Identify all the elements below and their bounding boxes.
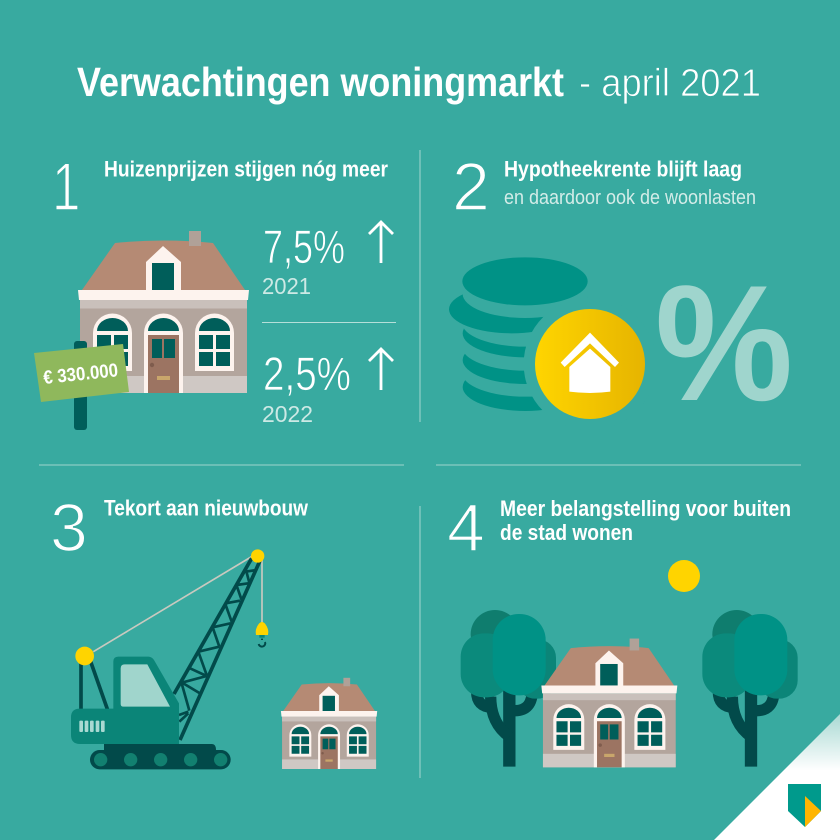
stat 2022: 2,5% bbox=[263, 347, 351, 400]
illustration: house with price sign bbox=[34, 231, 249, 430]
illustration: small house bbox=[281, 678, 377, 769]
stat 2021: 7,5% bbox=[263, 220, 345, 273]
number 2: 2 bbox=[452, 149, 490, 225]
stat 2022 bbox=[262, 347, 351, 427]
number 3: 3 bbox=[50, 490, 88, 566]
corner white triangle bbox=[714, 714, 840, 840]
heading 1: Huizenprijzen stijgen nóg meer bbox=[104, 156, 388, 182]
heading 4 bbox=[500, 496, 791, 545]
icon: sun bbox=[668, 560, 700, 592]
illustration: left tree bbox=[461, 610, 556, 767]
heading 2: Hypotheekrente blijft laag bbox=[504, 156, 742, 182]
illustration: house bbox=[541, 639, 677, 767]
logo bbox=[788, 784, 821, 827]
dividers bbox=[39, 150, 801, 778]
icon: coin stack with house bbox=[449, 257, 656, 430]
illustration: house with price sign: € 330.000 bbox=[42, 360, 119, 389]
illustration: right tree bbox=[702, 610, 798, 767]
stat 2021 bbox=[262, 220, 345, 299]
arrow up 2022 bbox=[369, 349, 393, 390]
arrow up 2021 bbox=[369, 222, 393, 263]
number 1: 1 bbox=[52, 149, 80, 225]
panel 4: living outside the city bbox=[447, 490, 798, 767]
panel 3: shortage of new builds bbox=[50, 490, 377, 769]
heading 3: Tekort aan nieuwbouw bbox=[104, 496, 308, 520]
heading 4: de stad wonen bbox=[500, 520, 633, 545]
panel 1: house prices bbox=[34, 149, 396, 430]
panel 2: mortgage rate bbox=[449, 149, 793, 435]
illustration: crane bbox=[71, 549, 268, 769]
number 4: 4 bbox=[447, 490, 485, 566]
heading 4: Meer belangstelling voor buiten bbox=[500, 496, 791, 521]
stat 2021: 2021 bbox=[262, 273, 311, 299]
subheading 2: en daardoor ook de woonlasten bbox=[504, 187, 756, 209]
stat 2022: 2022 bbox=[262, 401, 313, 427]
title: - april 2021 bbox=[579, 62, 761, 105]
percent sign: % bbox=[655, 251, 793, 435]
title: Verwachtingen woningmarkt bbox=[77, 59, 564, 105]
